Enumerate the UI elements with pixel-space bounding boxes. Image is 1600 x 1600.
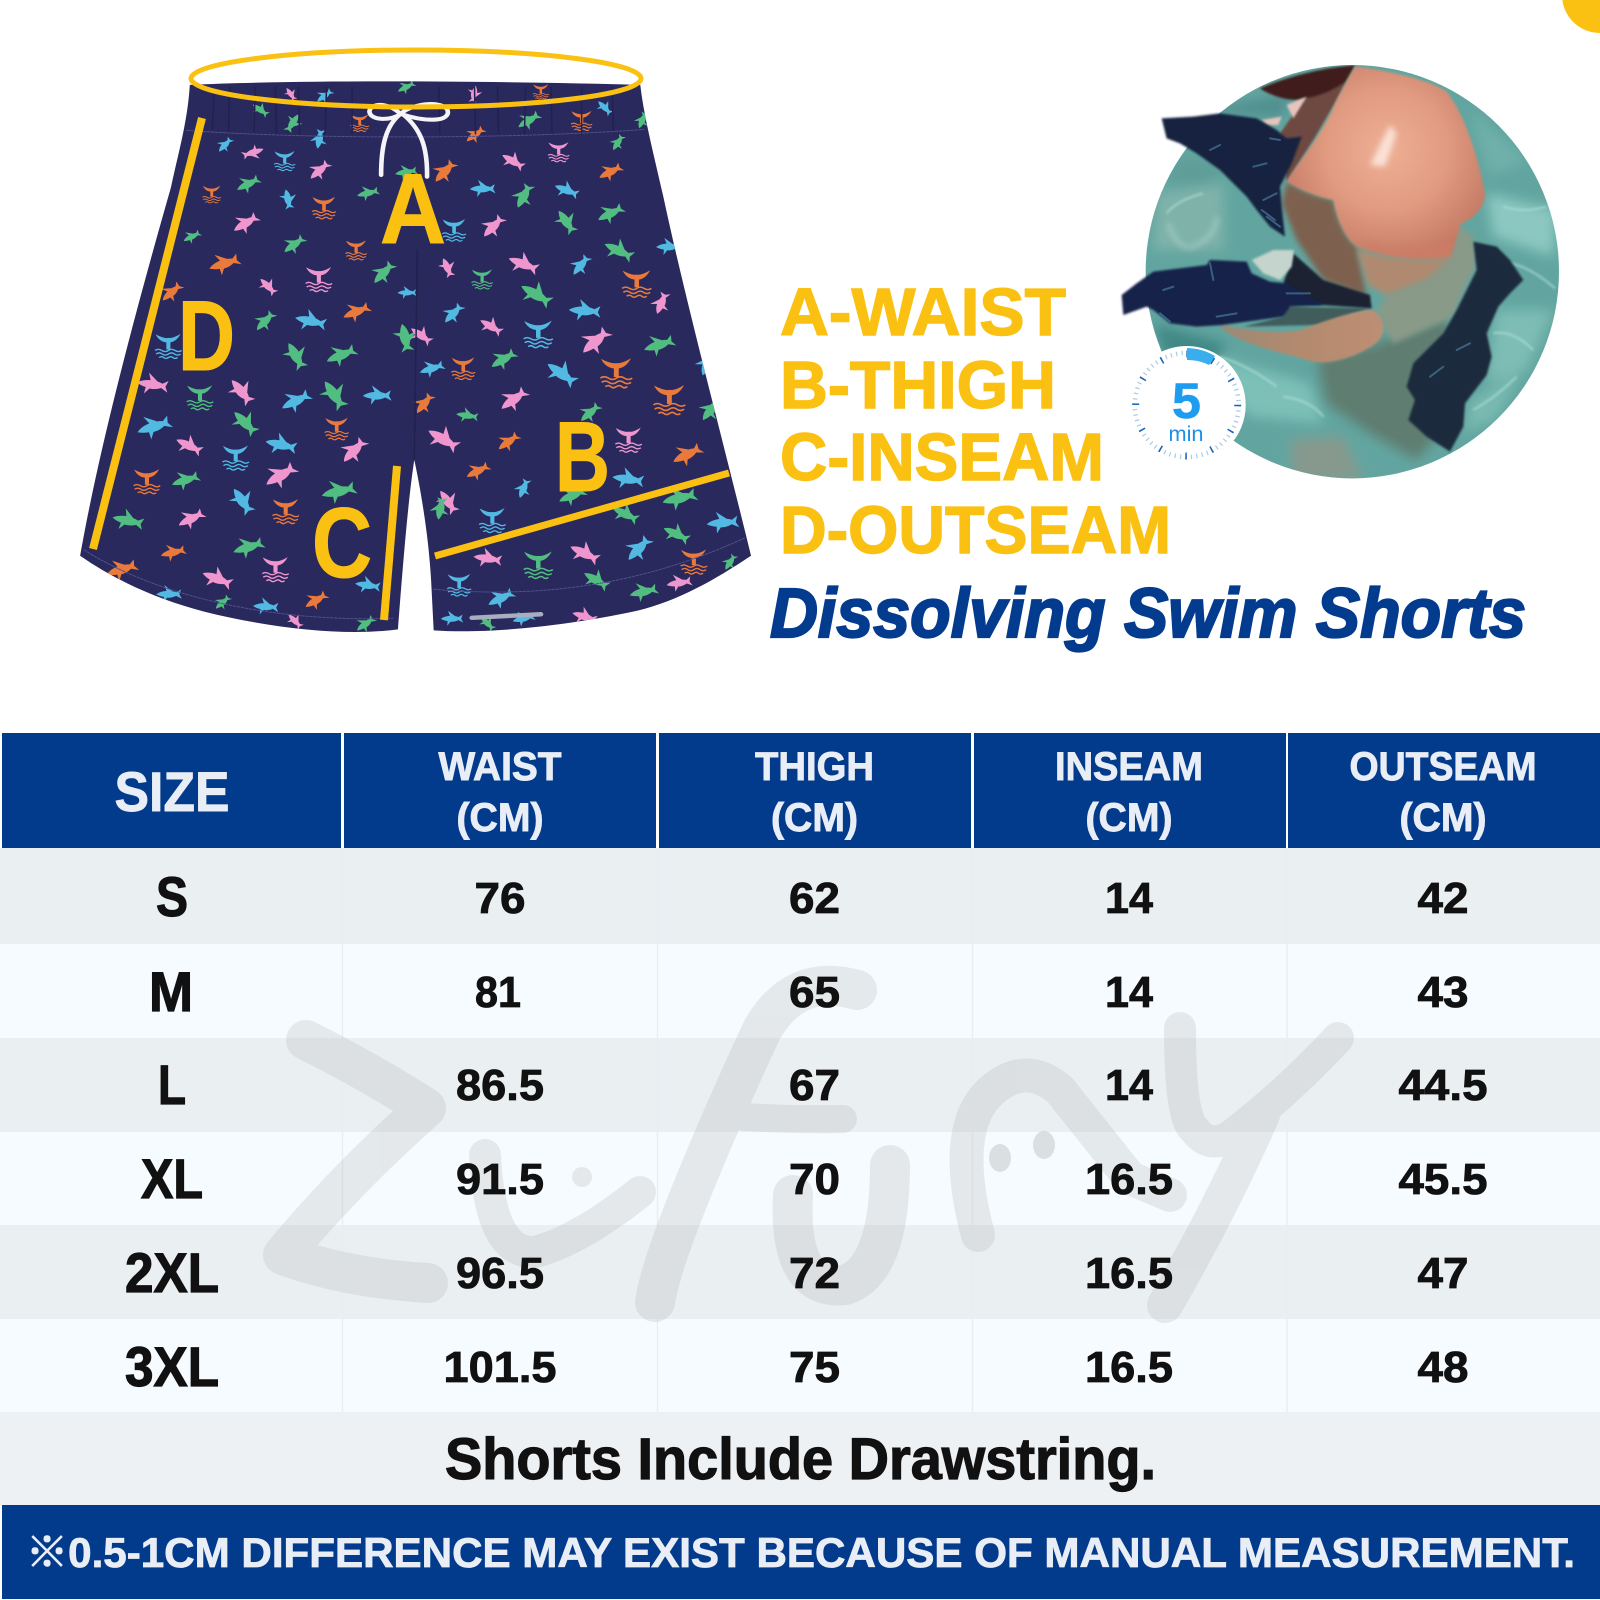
neck shade <box>1280 67 1353 182</box>
row S: 76 <box>474 874 526 923</box>
outseam measure line <box>93 118 202 549</box>
shoulder skin <box>1287 67 1485 259</box>
row 2XL: 72 <box>789 1249 840 1298</box>
row M <box>149 960 1468 1023</box>
torso side <box>1377 223 1477 343</box>
photo water and body <box>1143 63 1563 483</box>
dark fabric middle <box>1122 260 1323 327</box>
drawstring <box>369 104 448 177</box>
upper back <box>1282 182 1367 297</box>
row 3XL <box>125 1335 1468 1398</box>
disclaimer text: ※0.5-1CM DIFFERENCE MAY EXIST BECAUSE OF MANUAL MEASUREMENT. <box>26 1529 1575 1576</box>
dark fabric top <box>1162 113 1302 237</box>
watermark logo <box>283 986 1338 1305</box>
timer major ticks <box>1135 354 1238 456</box>
timer minor ticks <box>1135 353 1239 457</box>
row XL: 70 <box>789 1155 840 1204</box>
row S: 42 <box>1418 874 1468 923</box>
row 2XL <box>125 1241 1468 1304</box>
row M: 65 <box>789 968 840 1017</box>
size table <box>0 733 1600 1505</box>
timer unit: min <box>1168 423 1204 446</box>
inseam column header: INSEAM <box>1055 745 1203 789</box>
drawstring note: Shorts Include Drawstring. <box>445 1427 1156 1492</box>
row L: 67 <box>789 1061 840 1110</box>
row S: 62 <box>789 874 840 923</box>
waist unit: (CM) <box>456 796 544 840</box>
row S: 14 <box>1105 874 1154 923</box>
product title: Dissolving Swim Shorts <box>770 574 1526 652</box>
disclaimer background <box>2 1505 1600 1599</box>
dark fabric right <box>1407 242 1523 452</box>
waist column header: WAIST <box>438 745 562 789</box>
letter C: C <box>312 487 372 598</box>
row 2XL: 47 <box>1418 1249 1468 1298</box>
table header labels <box>114 745 1536 840</box>
row 3XL: 75 <box>789 1343 840 1392</box>
lower arm <box>1220 310 1383 362</box>
thigh column header: THIGH <box>755 745 874 789</box>
row S <box>156 865 1468 928</box>
shorts body <box>80 81 751 632</box>
timer number: 5 <box>1172 373 1201 429</box>
watermark dots <box>989 1131 1055 1172</box>
row XL <box>141 1147 1488 1210</box>
row 3XL: 3XL <box>125 1335 219 1398</box>
row L: L <box>158 1053 186 1116</box>
letter A: A <box>380 153 446 264</box>
legend B: B-THIGH <box>780 348 1056 423</box>
shorts illustration <box>80 50 751 636</box>
row 3XL: 101.5 <box>444 1343 556 1392</box>
arm shadow <box>1243 307 1370 327</box>
water tones <box>1153 93 1557 480</box>
legend C: C-INSEAM <box>780 420 1104 495</box>
inseam unit: (CM) <box>1086 796 1172 840</box>
water ripples <box>1167 193 1555 417</box>
fabric highlights <box>1160 138 1470 377</box>
shorts seams <box>84 87 745 619</box>
pale skin bits <box>1262 97 1307 125</box>
table row backgrounds <box>0 848 1600 1505</box>
row 2XL: 16.5 <box>1085 1249 1173 1298</box>
row XL: 16.5 <box>1085 1155 1173 1204</box>
letter B: B <box>555 401 610 512</box>
submerged torso <box>1317 317 1463 460</box>
disclaimer bar <box>2 1505 1600 1599</box>
legend list <box>780 275 1171 568</box>
table header background <box>2 733 1600 848</box>
lower shoulder tone <box>1368 248 1454 261</box>
size column header: SIZE <box>114 760 230 823</box>
waist measure ellipse <box>191 50 641 107</box>
row L: 44.5 <box>1398 1061 1488 1110</box>
skin highlight <box>1370 125 1397 167</box>
shark print pattern <box>102 77 741 636</box>
hairy forearm <box>1357 248 1452 295</box>
legend A: A-WAIST <box>780 275 1066 350</box>
timer dial <box>1128 346 1246 464</box>
row L: 14 <box>1105 1061 1154 1110</box>
row 3XL: 16.5 <box>1085 1343 1173 1392</box>
row M: 14 <box>1105 968 1154 1017</box>
row M: 43 <box>1418 968 1468 1017</box>
head shadow <box>1260 65 1355 100</box>
dissolving photo illustration <box>1122 63 1563 483</box>
five minute timer badge <box>1128 346 1246 464</box>
corner yellow circle <box>1562 0 1600 33</box>
row 3XL: 48 <box>1418 1343 1468 1392</box>
row L: 86.5 <box>456 1061 544 1110</box>
row 2XL: 96.5 <box>456 1249 544 1298</box>
pale fabric fragment <box>1252 250 1294 280</box>
inseam measure line <box>384 466 397 620</box>
row XL: 91.5 <box>456 1155 544 1204</box>
row M: M <box>149 960 193 1023</box>
row S: S <box>156 865 188 928</box>
legend D: D-OUTSEAM <box>780 493 1171 568</box>
outseam unit: (CM) <box>1400 796 1486 840</box>
outseam column header: OUTSEAM <box>1350 745 1536 789</box>
row XL: 45.5 <box>1398 1155 1488 1204</box>
letter D: D <box>178 280 235 391</box>
thigh unit: (CM) <box>771 796 858 840</box>
row 2XL: 2XL <box>125 1241 219 1304</box>
row XL: XL <box>141 1147 203 1210</box>
timer elapsed wedge <box>1187 348 1215 365</box>
thigh measure line <box>435 473 729 556</box>
row M: 81 <box>475 968 521 1017</box>
row L <box>158 1053 1488 1116</box>
dark fabric middle shade <box>1283 253 1372 308</box>
